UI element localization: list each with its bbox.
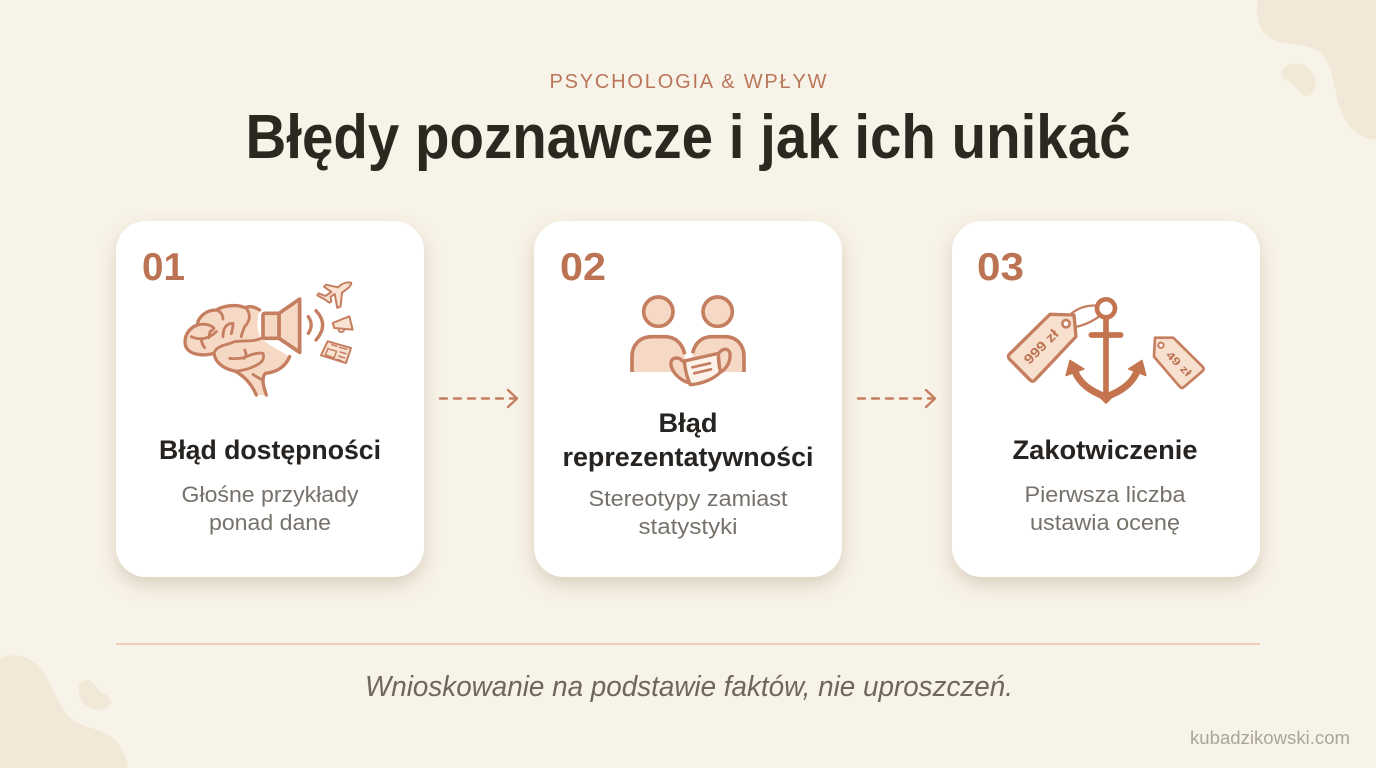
icon: anchor with price tags xyxy=(1008,299,1204,403)
icon: anchor with price tags: 999 zł xyxy=(1021,326,1062,367)
card 2 heading: Błąd xyxy=(658,408,718,438)
card 3 description xyxy=(1024,482,1186,535)
eyebrow label: PSYCHOLOGIA & WPŁYW xyxy=(550,71,827,93)
icon: brain with megaphone xyxy=(185,282,353,395)
card 1 description: Głośne przykłady xyxy=(182,482,358,507)
card 3 heading: Zakotwiczenie xyxy=(1012,435,1198,465)
title: Błędy poznawcze i jak ich unikać xyxy=(246,103,1130,172)
card 3 description: ustawia ocenę xyxy=(1030,510,1180,535)
card 2 description: statystyki xyxy=(638,514,738,539)
card 2 heading xyxy=(562,408,814,472)
card 2 number: 02 xyxy=(560,246,606,289)
card 1 description: ponad dane xyxy=(209,510,331,535)
blob: top right xyxy=(1257,0,1376,140)
panel: card 3 xyxy=(952,221,1260,577)
card 2 heading: reprezentatywności xyxy=(562,442,814,472)
panel: card 2 xyxy=(534,221,842,577)
arrow: card 2 to card 3 xyxy=(858,390,935,407)
card 3 description: Pierwsza liczba xyxy=(1024,482,1186,507)
panel: card 1 xyxy=(116,221,424,577)
card 1 number: 01 xyxy=(142,246,185,289)
closing statement: Wnioskowanie na podstawie faktów, nie uproszczeń. xyxy=(365,671,1013,703)
card 1 description xyxy=(182,482,358,535)
card 2 description: Stereotypy zamiast xyxy=(588,486,788,511)
card 3 number: 03 xyxy=(977,246,1024,289)
icon: two people and mask xyxy=(632,297,744,385)
card 2 description xyxy=(588,486,788,539)
icon: anchor with price tags: 49 zł xyxy=(1163,349,1193,379)
card 1 heading: Błąd dostępności xyxy=(159,435,381,465)
arrow: card 1 to card 2 xyxy=(440,390,517,407)
website credit: kubadzikowski.com xyxy=(1190,728,1350,748)
blob: bottom left xyxy=(0,655,128,768)
